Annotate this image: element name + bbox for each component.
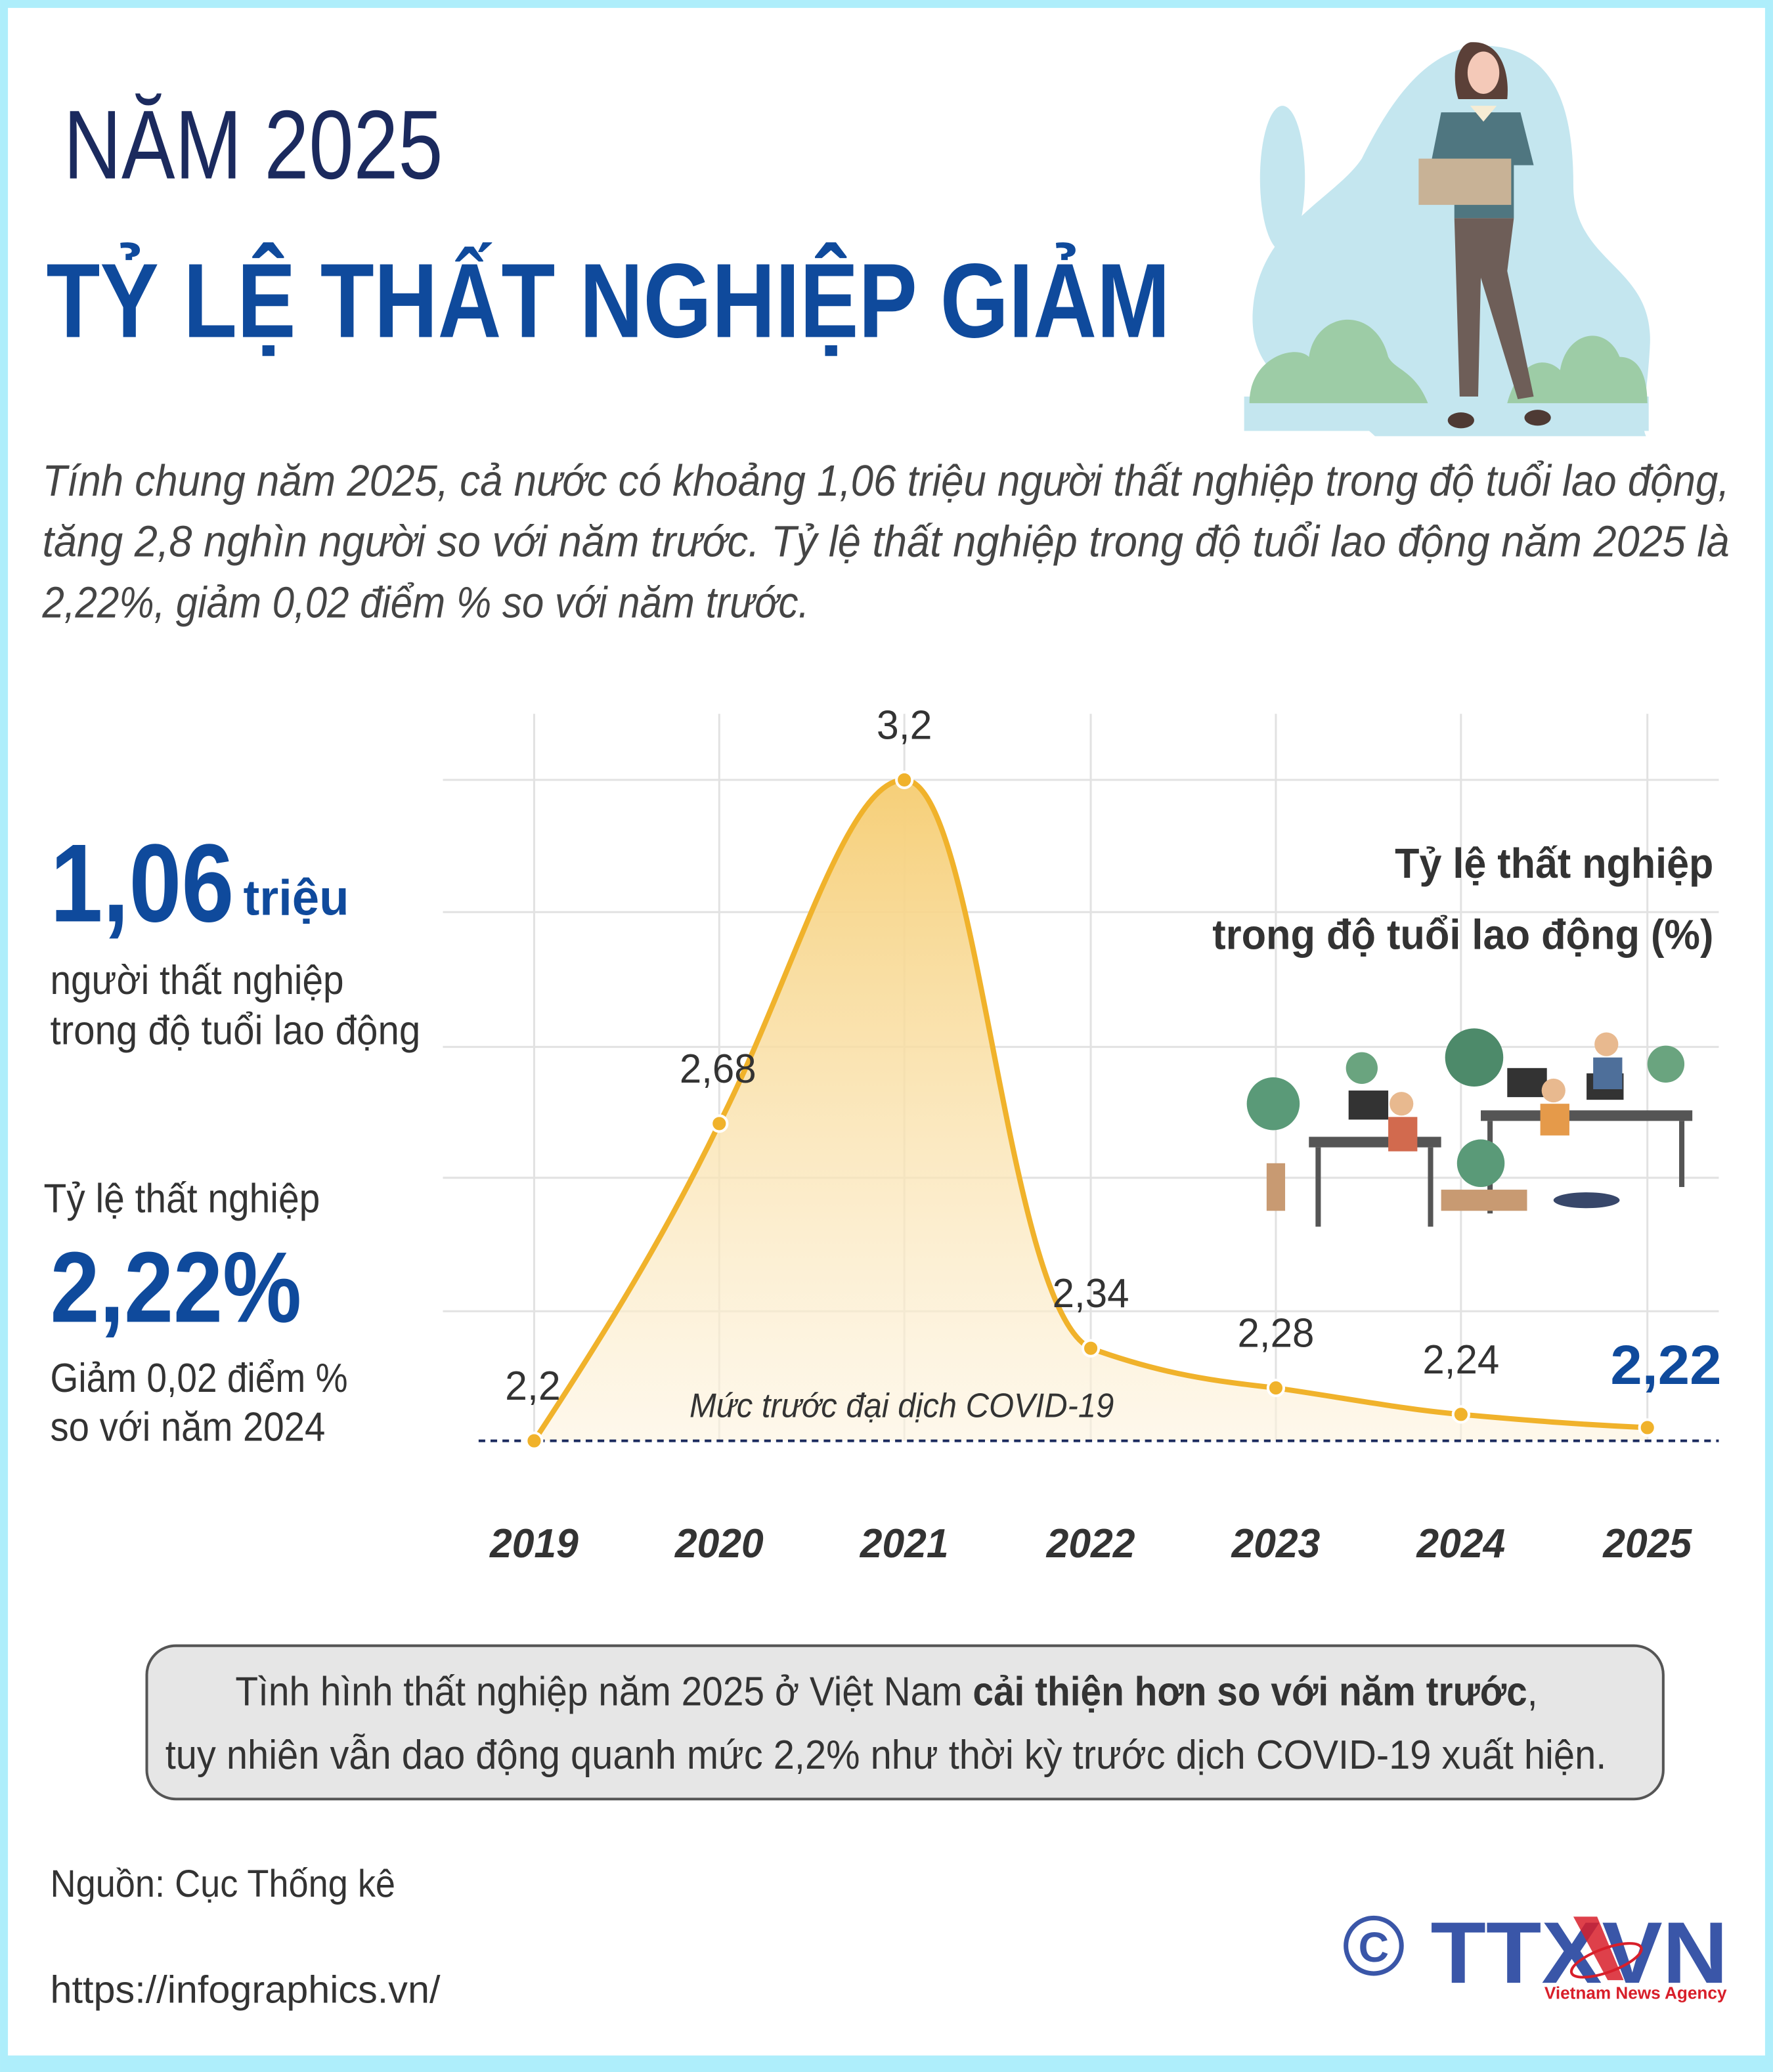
stat: 1,06 million [51, 821, 420, 1054]
stat: 2,22%: Giảm 0,02 điểm % [51, 1356, 348, 1401]
logo: TTXVN: TTXVN [1431, 1905, 1728, 2002]
callout: conclusion box: Tình hình thất nghiệp năm 2025 ở Việt Nam cải thiện hơn so với năm trước, [235, 1669, 1538, 1714]
illustration: office [1247, 1028, 1692, 1226]
stat: 1,06 million: trong độ tuổi lao động [51, 1008, 420, 1054]
stat: 2,22%: Tỷ lệ thất nghiệp [43, 1176, 320, 1221]
chart: unemployment rate line: 2025 [1602, 1521, 1692, 1566]
logo: TTXVN: C [1359, 1924, 1389, 1971]
callout: conclusion box [147, 1646, 1663, 1799]
chart: unemployment rate line: 2023 [1231, 1521, 1320, 1566]
illustration: woman with box [1244, 42, 1650, 436]
chart: unemployment rate line: 2,28 [1238, 1311, 1314, 1356]
paragraph: summary: 2,22%, giảm 0,02 điểm % so với năm trước. [42, 578, 809, 627]
chart: unemployment rate line: 2,24 [1422, 1337, 1499, 1383]
title: TỶ LỆ THẤT NGHIỆP GIẢM [46, 241, 1170, 360]
chart: unemployment rate line: 2,34 [1053, 1271, 1129, 1316]
chart: unemployment rate line: 2019 [489, 1521, 579, 1566]
chart: unemployment rate line: 2021 [860, 1521, 949, 1566]
chart: unemployment rate line: 2,22 [1610, 1333, 1721, 1396]
url: https://infographics.vn/ [51, 1968, 441, 2011]
stat: 2,22%: so với năm 2024 [51, 1405, 325, 1450]
legend: chart title: trong độ tuổi lao động (%) [1212, 911, 1713, 959]
legend: chart title: Tỷ lệ thất nghiệp [1395, 840, 1713, 887]
chart: unemployment rate line: 2,2 [505, 1364, 561, 1409]
stat: 2,22%: 2,22% [51, 1231, 301, 1343]
chart: unemployment rate line: 2022 [1046, 1521, 1135, 1566]
chart: unemployment rate line: 2024 [1416, 1521, 1505, 1566]
chart: unemployment rate line: 2020 [674, 1521, 764, 1566]
chart: unemployment rate line: 3,2 [877, 702, 932, 748]
stat: 1,06 million: triệu [243, 870, 349, 926]
heading: year: NĂM 2025 [64, 90, 443, 200]
stat: 1,06 million: 1,06 [51, 821, 234, 945]
logo: TTXVN: Vietnam News Agency [1544, 1983, 1727, 2002]
legend: chart title [1212, 840, 1713, 959]
callout: conclusion box: tuy nhiên vẫn dao động quanh mức 2,2% như thời kỳ trước dịch COVID-19 xuất hiện. [165, 1733, 1606, 1778]
source: Nguồn: Cục Thống kê [51, 1863, 395, 1905]
stat: 2,22% [43, 1176, 348, 1450]
paragraph: summary [42, 457, 1730, 627]
chart: unemployment rate line: 2,68 [680, 1047, 756, 1092]
chart: unemployment rate line: Mức trước đại dịch COVID-19 [690, 1387, 1114, 1425]
paragraph: summary: tăng 2,8 nghìn người so với năm trước. Tỷ lệ thất nghiệp trong độ tuổi lao động năm 2025 là [42, 518, 1730, 567]
stat: 1,06 million: người thất nghiệp [51, 958, 344, 1003]
chart: unemployment rate line [479, 702, 1721, 1566]
